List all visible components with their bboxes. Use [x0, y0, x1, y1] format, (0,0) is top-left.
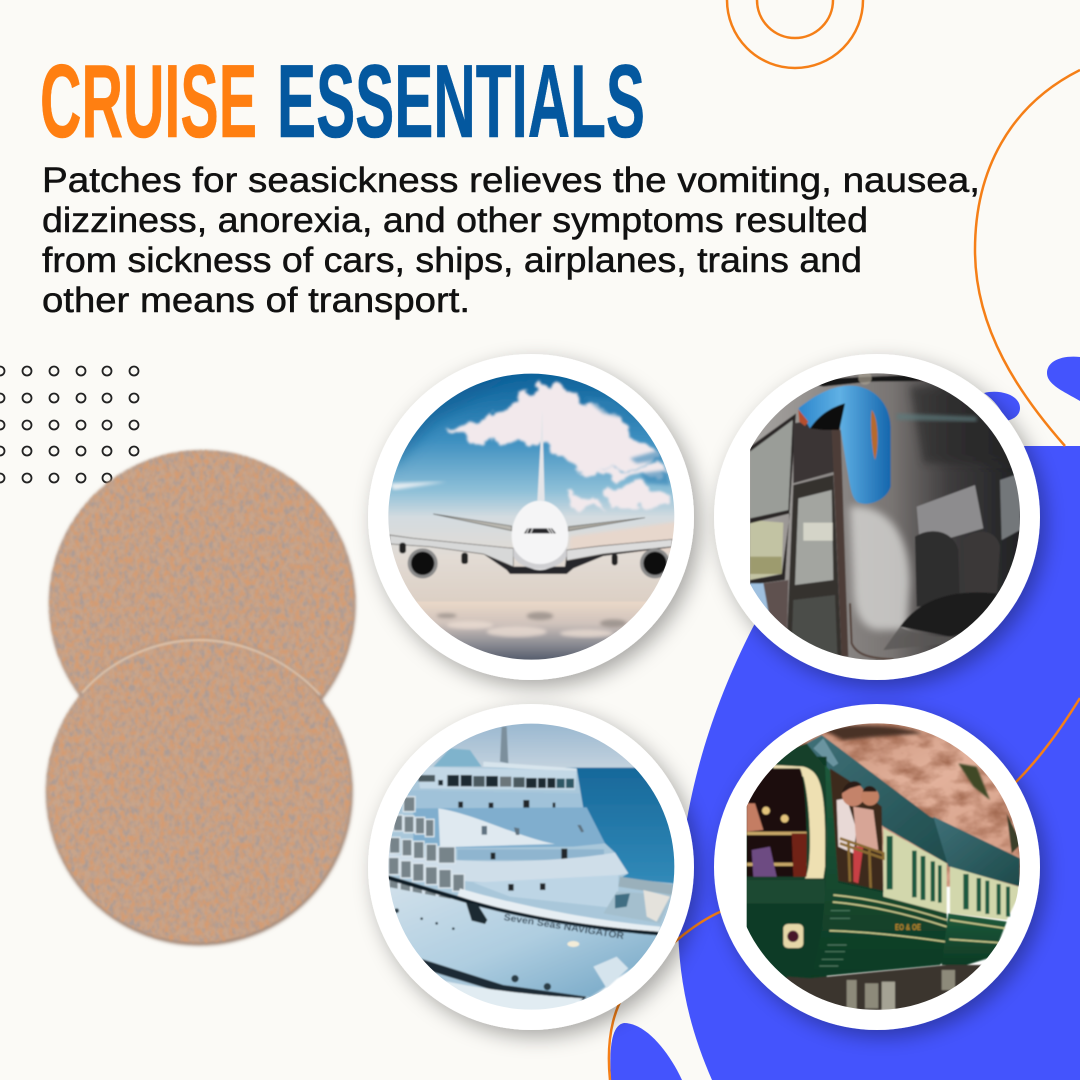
patch: upper	[50, 451, 355, 756]
end section	[743, 757, 827, 983]
photo: train: EO & OE	[895, 922, 921, 932]
description text: Patches for seasickness relieves the vomiting, nausea,	[42, 161, 980, 200]
description text: from sickness of cars, ships, airplanes, trains and	[42, 241, 862, 280]
title: CRUISE	[40, 44, 257, 160]
title: ESSENTIALS	[277, 44, 645, 160]
carriage roofs	[807, 735, 958, 863]
left side windows	[750, 443, 766, 518]
description text: other means of transport.	[42, 281, 470, 320]
description text	[42, 161, 980, 320]
photo: train	[714, 704, 1040, 1030]
open window with passengers	[830, 768, 883, 892]
decorative orange rings top	[727, 0, 863, 68]
ship name: Seven Seas NAVIGATOR	[503, 912, 625, 941]
decorative blue blobs and shape	[610, 357, 1080, 1080]
ship base	[387, 767, 673, 1010]
decorative orange curves	[609, 70, 1080, 1080]
tail and stabilizers	[537, 410, 545, 501]
undercarriage	[787, 965, 983, 1010]
patch: lower	[47, 639, 352, 945]
windshield	[850, 506, 910, 630]
hull	[387, 887, 660, 997]
carriage side	[883, 828, 947, 913]
photo: bus	[714, 354, 1040, 680]
description text: dizziness, anorexia, and other symptoms resulted	[42, 201, 868, 240]
engines	[399, 543, 406, 553]
balconies	[388, 795, 466, 900]
photo: cruise ship	[368, 704, 694, 1030]
aft deck	[618, 877, 673, 895]
title	[40, 44, 645, 160]
fuselage	[512, 501, 568, 570]
photo: airplane	[368, 354, 694, 680]
superstructure	[433, 748, 482, 767]
mirror	[798, 386, 891, 504]
wings	[484, 546, 671, 575]
dot grid	[0, 366, 138, 482]
